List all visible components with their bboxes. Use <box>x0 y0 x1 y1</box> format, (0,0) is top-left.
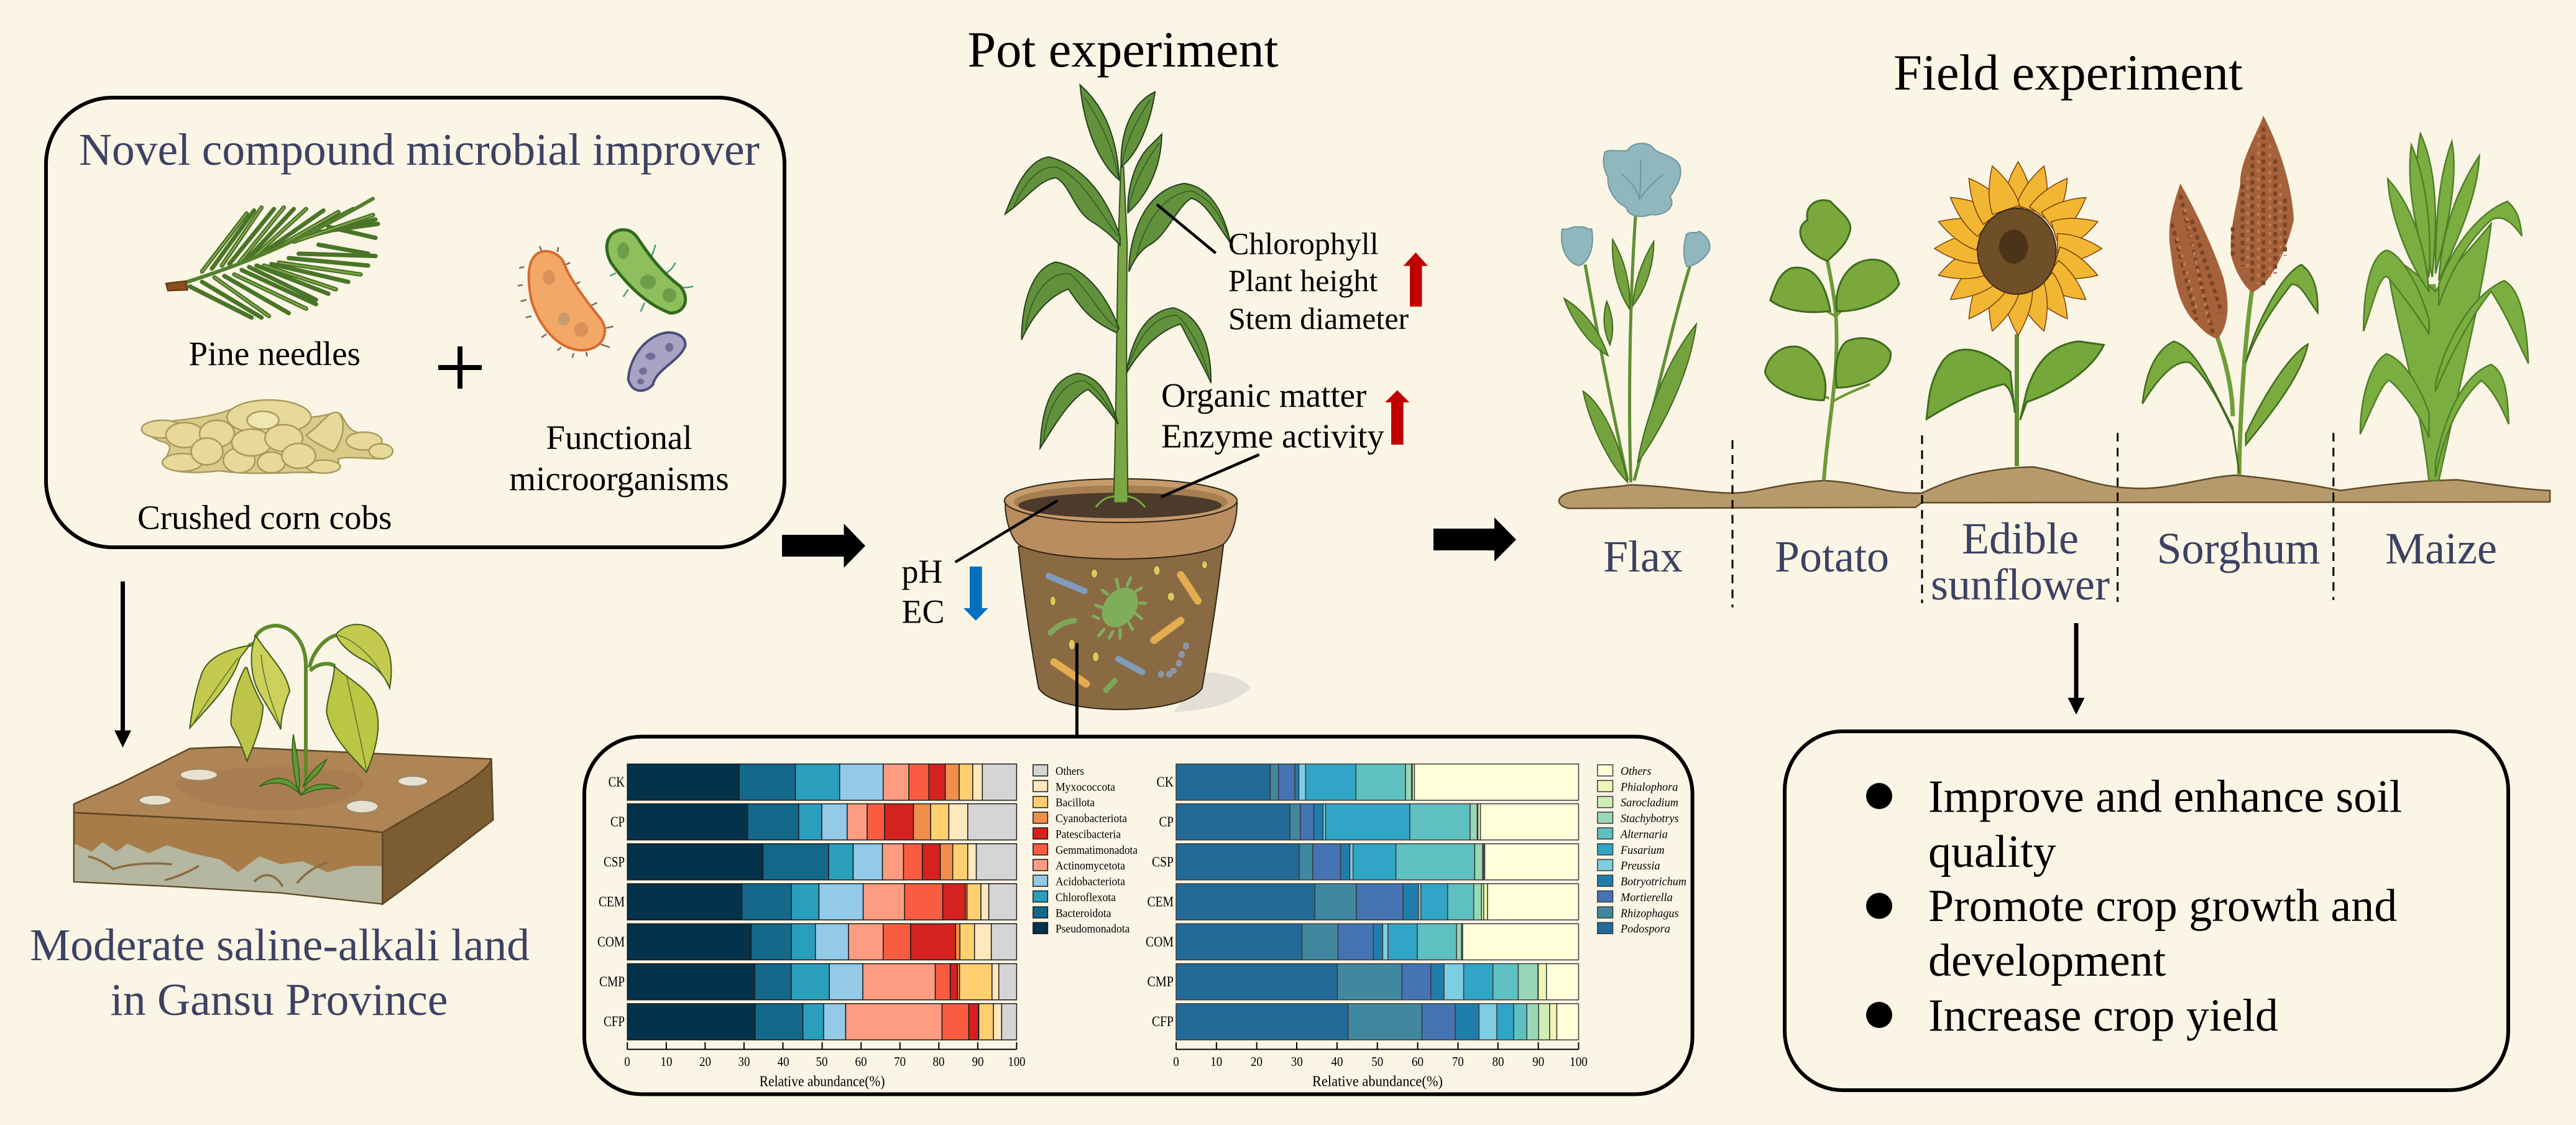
bar chart: fungal genera relative abundance: 60 <box>1412 1054 1424 1069</box>
plant stem <box>1113 167 1128 503</box>
heading: pot experiment: Pot experiment <box>967 21 1279 78</box>
label: chlorophyll, plant height, stem diameter <box>1228 226 1409 336</box>
plant: potato <box>1765 200 1899 481</box>
bar chart: bacterial phyla relative abundance: 10 <box>660 1054 673 1069</box>
bar chart: fungal genera relative abundance: Relative abundance(%) <box>1312 1074 1443 1090</box>
crop labels: Sorghum <box>2157 524 2320 573</box>
soil top surface <box>74 747 491 833</box>
leader line: soil properties <box>1161 455 1259 497</box>
label: moderate saline-alkali land in Gansu Province: Moderate saline-alkali land <box>30 920 530 970</box>
crop labels: Edible <box>1962 514 2079 563</box>
bullet list: improve soil, promote growth, increase yield: Promote crop growth and <box>1928 881 2397 932</box>
label: chlorophyll, plant height, stem diameter: Stem diameter <box>1228 301 1409 336</box>
heading: field experiment: Field experiment <box>1893 44 2243 101</box>
bar chart: bacterial phyla relative abundance: 0 <box>624 1054 630 1069</box>
potting soil <box>1018 493 1221 518</box>
arrow: pH and EC decrease <box>964 567 988 621</box>
arrow: block arrow to field experiment <box>1433 517 1516 562</box>
bar chart: bacterial phyla relative abundance: 50 <box>816 1054 828 1069</box>
legend swatches: bacteria <box>1033 765 1047 933</box>
heading: novel compound microbial improver: Novel compound microbial improver <box>79 124 760 175</box>
arrow: field experiment to results <box>2068 623 2085 715</box>
bar chart: bacterial phyla relative abundance: COM <box>597 934 625 950</box>
label: moderate saline-alkali land in Gansu Province <box>30 920 530 1025</box>
panel: microbial community charts <box>584 736 1693 1095</box>
bar chart: bacterial phyla relative abundance: CK <box>609 774 625 790</box>
bar chart: fungal genera relative abundance: 0 <box>1173 1054 1179 1069</box>
bar chart: fungal genera relative abundance: CK <box>1156 774 1174 790</box>
bar chart: fungal genera relative abundance: CSP <box>1152 854 1174 869</box>
bar chart: bacterial phyla relative abundance: Chloroflexota <box>1056 891 1116 904</box>
arrow: block arrow to pot experiment <box>782 524 865 568</box>
bar chart: bacterial phyla relative abundance: CMP <box>599 974 625 989</box>
illustration: potted maize plant <box>1005 85 1250 712</box>
bar chart: fungal genera relative abundance: Mortierella <box>1620 891 1673 904</box>
bar chart: bacterial phyla relative abundance: Bacillota <box>1056 797 1095 810</box>
bar chart: fungal genera relative abundance: Preussia <box>1620 859 1660 873</box>
bar chart: fungal genera relative abundance: Rhizophagus <box>1620 907 1679 920</box>
arrow: improver to soil <box>114 581 131 748</box>
bar chart: bacterial phyla relative abundance: Myxococcota <box>1056 780 1116 794</box>
crop labels: Maize <box>2385 524 2497 573</box>
arrow: soil properties increase <box>1385 391 1409 445</box>
bar chart: fungal genera relative abundance: 50 <box>1371 1054 1383 1069</box>
wilting plant <box>190 624 391 795</box>
bar chart: fungal genera relative abundance: 80 <box>1492 1054 1504 1069</box>
bullet list: improve soil, promote growth, increase yield: Improve and enhance soil <box>1928 771 2402 822</box>
bar chart: bacterial phyla relative abundance: 80 <box>932 1054 945 1069</box>
crop labels <box>1603 514 2497 609</box>
leader line: pH and EC <box>955 501 1057 562</box>
bar chart: bacterial phyla relative abundance: 100 <box>1008 1054 1026 1069</box>
bar chart: bacterial phyla relative abundance: CP <box>610 814 625 830</box>
bar chart: fungal genera relative abundance: 30 <box>1291 1054 1303 1069</box>
icon: pine needles <box>166 198 378 318</box>
bar chart: fungal genera relative abundance: 20 <box>1251 1054 1263 1069</box>
bullet list: improve soil, promote growth, increase yield: Increase crop yield <box>1928 990 2278 1041</box>
bar chart: fungal genera relative abundance: CFP <box>1152 1014 1174 1029</box>
bar chart: fungal genera relative abundance: Botryotrichum <box>1621 876 1686 888</box>
panel: novel compound microbial improver <box>46 98 784 547</box>
crop labels: Potato <box>1775 532 1889 581</box>
label: pH, EC: EC <box>901 593 945 631</box>
bar chart: bacterial phyla relative abundance: Acidobacteriota <box>1056 876 1126 888</box>
pot rim <box>1005 503 1237 559</box>
bar chart: bacterial phyla relative abundance: Bacteroidota <box>1056 907 1111 920</box>
label: organic matter, enzyme activity: Organic matter <box>1161 376 1366 414</box>
arrow: traits increase <box>1404 252 1428 307</box>
illustration: field crops <box>1559 116 2550 508</box>
crop divider lines <box>1732 433 2334 608</box>
bar chart: bacterial phyla relative abundance: Relative abundance(%) <box>760 1074 885 1090</box>
bullet list: improve soil, promote growth, increase yield: development <box>1928 935 2166 986</box>
salt crust pebbles <box>180 769 218 780</box>
label: pine needles: Pine needles <box>189 335 361 373</box>
label: chlorophyll, plant height, stem diameter: Chlorophyll <box>1228 226 1379 261</box>
bar chart: fungal genera relative abundance: CMP <box>1148 974 1174 989</box>
crop labels: sunflower <box>1931 560 2110 609</box>
bar chart: bacterial phyla relative abundance: 60 <box>855 1054 867 1069</box>
maize leaves <box>1005 85 1231 448</box>
bar chart: bacterial phyla relative abundance: CEM <box>599 894 625 910</box>
bar chart: bacterial phyla relative abundance: 30 <box>738 1054 750 1069</box>
bar chart: fungal genera relative abundance: 90 <box>1532 1054 1544 1069</box>
plant: edible sunflower <box>1926 161 2104 466</box>
pot body with soil microbes <box>1018 544 1223 710</box>
bar chart: fungal genera relative abundance: Sarocladium <box>1621 797 1678 810</box>
legend swatches: fungi <box>1598 765 1613 933</box>
label: organic matter, enzyme activity: Enzyme activity <box>1161 417 1384 455</box>
label: functional microorganisms: Functional <box>546 419 692 456</box>
bar chart: fungal genera relative abundance: Others <box>1621 765 1651 778</box>
bar chart: fungal genera relative abundance: Alternaria <box>1619 828 1668 841</box>
bullet list: improve soil, promote growth, increase yield: quality <box>1928 826 2056 877</box>
bar chart: fungal genera relative abundance: CP <box>1159 814 1174 830</box>
bar chart: fungal genera relative abundance: Podospora <box>1620 923 1670 936</box>
bar chart: fungal genera relative abundance: 10 <box>1210 1054 1222 1069</box>
bullet list: improve soil, promote growth, increase yield <box>1866 771 2402 1041</box>
leader line: pot to microbial community chart <box>1075 643 1079 736</box>
bar chart: bacterial phyla relative abundance: 70 <box>894 1054 906 1069</box>
bar chart: bacterial phyla relative abundance: 40 <box>777 1054 789 1069</box>
bar chart: bacterial phyla relative abundance: Actinomycetota <box>1056 859 1126 873</box>
bar chart: fungal genera relative abundance: Fusarium <box>1620 844 1665 857</box>
soil strip <box>1559 467 2550 508</box>
plant: sorghum <box>2143 116 2318 475</box>
soil right face <box>382 759 493 904</box>
bar chart: bacterial phyla relative abundance <box>597 764 1138 1090</box>
bar chart: bacterial phyla relative abundance: Pseudomonadota <box>1056 923 1130 936</box>
bar chart: fungal genera relative abundance: 100 <box>1570 1054 1588 1069</box>
bar chart: fungal genera relative abundance: CEM <box>1148 894 1174 910</box>
bar chart: bacterial phyla relative abundance: Cyanobacteriota <box>1056 812 1128 825</box>
bar chart: bacterial phyla relative abundance: 20 <box>699 1054 711 1069</box>
plant: flax <box>1562 143 1710 483</box>
bar chart: bacterial phyla relative abundance: Others <box>1056 765 1084 778</box>
label: chlorophyll, plant height, stem diameter: Plant height <box>1228 263 1378 298</box>
bar chart: bacterial phyla relative abundance: CSP <box>604 854 625 869</box>
icon: plus sign <box>438 346 482 389</box>
bar chart: bacterial phyla relative abundance: Gemmatimonadota <box>1056 844 1138 857</box>
soil front face <box>74 813 382 904</box>
bar chart: bacterial phyla relative abundance: Patescibacteria <box>1056 828 1121 841</box>
label: pH, EC: pH <box>901 553 942 590</box>
bar chart: fungal genera relative abundance: Stachybotrys <box>1621 812 1679 825</box>
icon: functional microorganisms <box>518 229 693 391</box>
crop labels: Flax <box>1603 532 1683 581</box>
bar chart: bacterial phyla relative abundance: CFP <box>604 1014 625 1029</box>
bar chart: fungal genera relative abundance: Phialophora <box>1620 780 1678 794</box>
leader line: leaf traits <box>1157 205 1216 253</box>
icon: crushed corn cobs <box>142 400 393 473</box>
bar chart: fungal genera relative abundance: COM <box>1146 934 1174 950</box>
label: pH, EC <box>901 553 945 631</box>
bar chart: fungal genera relative abundance: 40 <box>1332 1054 1343 1069</box>
panel: outcomes <box>1785 731 2508 1090</box>
label: organic matter, enzyme activity <box>1161 376 1384 455</box>
label: functional microorganisms: microorganisms <box>509 460 729 498</box>
label: crushed corn cobs: Crushed corn cobs <box>137 499 392 536</box>
illustration: saline-alkali soil block with wilting plant <box>74 624 493 904</box>
plant: maize <box>2360 134 2528 481</box>
pot shadow <box>1174 673 1250 712</box>
label: moderate saline-alkali land in Gansu Province: in Gansu Province <box>111 975 448 1025</box>
label: functional microorganisms <box>509 419 729 498</box>
bar chart: bacterial phyla relative abundance: 90 <box>972 1054 983 1069</box>
bar chart: fungal genera relative abundance: 70 <box>1452 1054 1464 1069</box>
bar chart: fungal genera relative abundance <box>1146 764 1686 1090</box>
